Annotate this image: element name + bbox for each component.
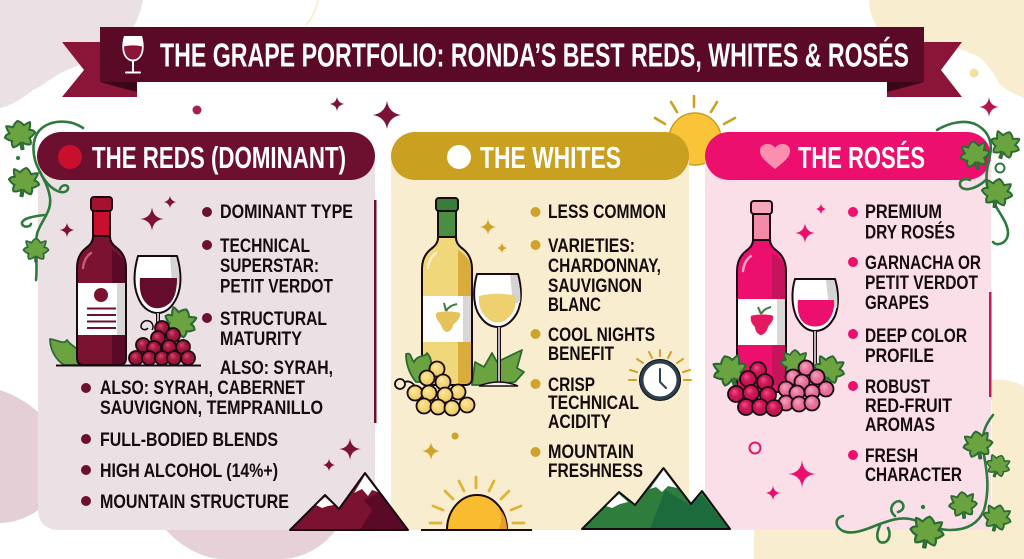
sparkles: red panel <box>60 196 361 471</box>
list: red characteristics <box>81 201 353 513</box>
icon: rising sun <box>421 477 532 530</box>
header: the roses <box>705 132 991 180</box>
list: white characteristics: LESS COMMON <box>548 201 666 223</box>
list: rose characteristics <box>848 201 981 486</box>
list: red characteristics: HIGH ALCOHOL (14%+) <box>100 460 278 482</box>
list: white characteristics: TECHNICAL <box>548 392 639 414</box>
icon: green mountains <box>582 468 730 529</box>
header: the reds: THE REDS (DOMINANT) <box>92 141 346 175</box>
vine: top left <box>2 118 83 280</box>
list: white characteristics: COOL NIGHTS <box>548 324 655 346</box>
list: white characteristics <box>530 201 666 482</box>
panel: the whites <box>391 132 691 530</box>
list: white characteristics: SAUVIGNON <box>548 275 642 297</box>
vine: bottom right <box>837 415 1014 550</box>
illustration: red wine bottle, glass and grapes <box>50 197 201 366</box>
list: red characteristics: DOMINANT TYPE <box>220 201 353 223</box>
header: the whites: THE WHITES <box>480 141 621 175</box>
list: rose characteristics: GARNACHA OR <box>865 252 981 274</box>
header: the reds <box>37 132 375 180</box>
list: white characteristics: VARIETIES: <box>548 235 635 257</box>
list: rose characteristics: PETIT VERDOT <box>865 272 978 294</box>
sparkles: white panel <box>422 219 507 460</box>
header: the roses: THE ROSÉS <box>798 140 925 175</box>
list: red characteristics: MATURITY <box>220 328 302 350</box>
title banner <box>62 27 962 97</box>
list: rose characteristics: DRY ROSÉS <box>865 220 955 244</box>
list: red characteristics: ALSO: SYRAH, CABERNET <box>100 377 305 399</box>
list: red characteristics: SAUVIGNON, TEMPRANILLO <box>100 397 323 419</box>
list: rose characteristics: GRAPES <box>865 292 929 314</box>
list: white characteristics: FRESHNESS <box>548 460 643 482</box>
list: white characteristics: MOUNTAIN <box>548 441 634 463</box>
vine: top right <box>937 122 1023 244</box>
icon: wine glass <box>122 36 144 74</box>
icon: red mountains <box>290 473 408 530</box>
icon: clock <box>629 350 691 400</box>
panel: the roses <box>705 132 992 530</box>
illustration: white wine bottle, glass and grapes <box>395 198 524 416</box>
list: white characteristics: CHARDONNAY, <box>548 255 661 277</box>
list: red characteristics: TECHNICAL <box>220 235 310 257</box>
list: red characteristics: SUPERSTAR: <box>220 255 319 277</box>
list: red characteristics: MOUNTAIN STRUCTURE <box>100 491 289 513</box>
list: red characteristics: FULL-BODIED BLENDS <box>100 429 278 451</box>
list: rose characteristics: RED-FRUIT <box>865 395 952 417</box>
list: rose characteristics: CHARACTER <box>865 464 962 486</box>
list: white characteristics: ACIDITY <box>548 411 611 433</box>
decorative sparkles upper <box>192 68 999 129</box>
header: the whites <box>391 132 689 180</box>
list: rose characteristics: PREMIUM <box>865 201 942 223</box>
list: white characteristics: BENEFIT <box>548 343 614 365</box>
sparkles: rose panel <box>750 204 826 500</box>
list: red characteristics: PETIT VERDOT <box>220 276 333 298</box>
list: rose characteristics: FRESH <box>865 445 918 467</box>
list: red characteristics: ALSO: SYRAH, <box>220 357 333 379</box>
illustration: rose wine bottle, glass and grapes <box>709 201 848 416</box>
list: white characteristics: BLANC <box>548 294 601 316</box>
list: rose characteristics: DEEP COLOR <box>865 325 967 347</box>
panel: the reds <box>37 132 376 530</box>
list: rose characteristics: ROBUST <box>865 376 930 398</box>
list: white characteristics: CRISP <box>548 374 595 396</box>
list: red characteristics: STRUCTURAL <box>220 308 327 330</box>
list: rose characteristics: PROFILE <box>865 345 934 367</box>
icon: sun behind headers <box>655 96 735 165</box>
list: rose characteristics: AROMAS <box>865 414 935 436</box>
